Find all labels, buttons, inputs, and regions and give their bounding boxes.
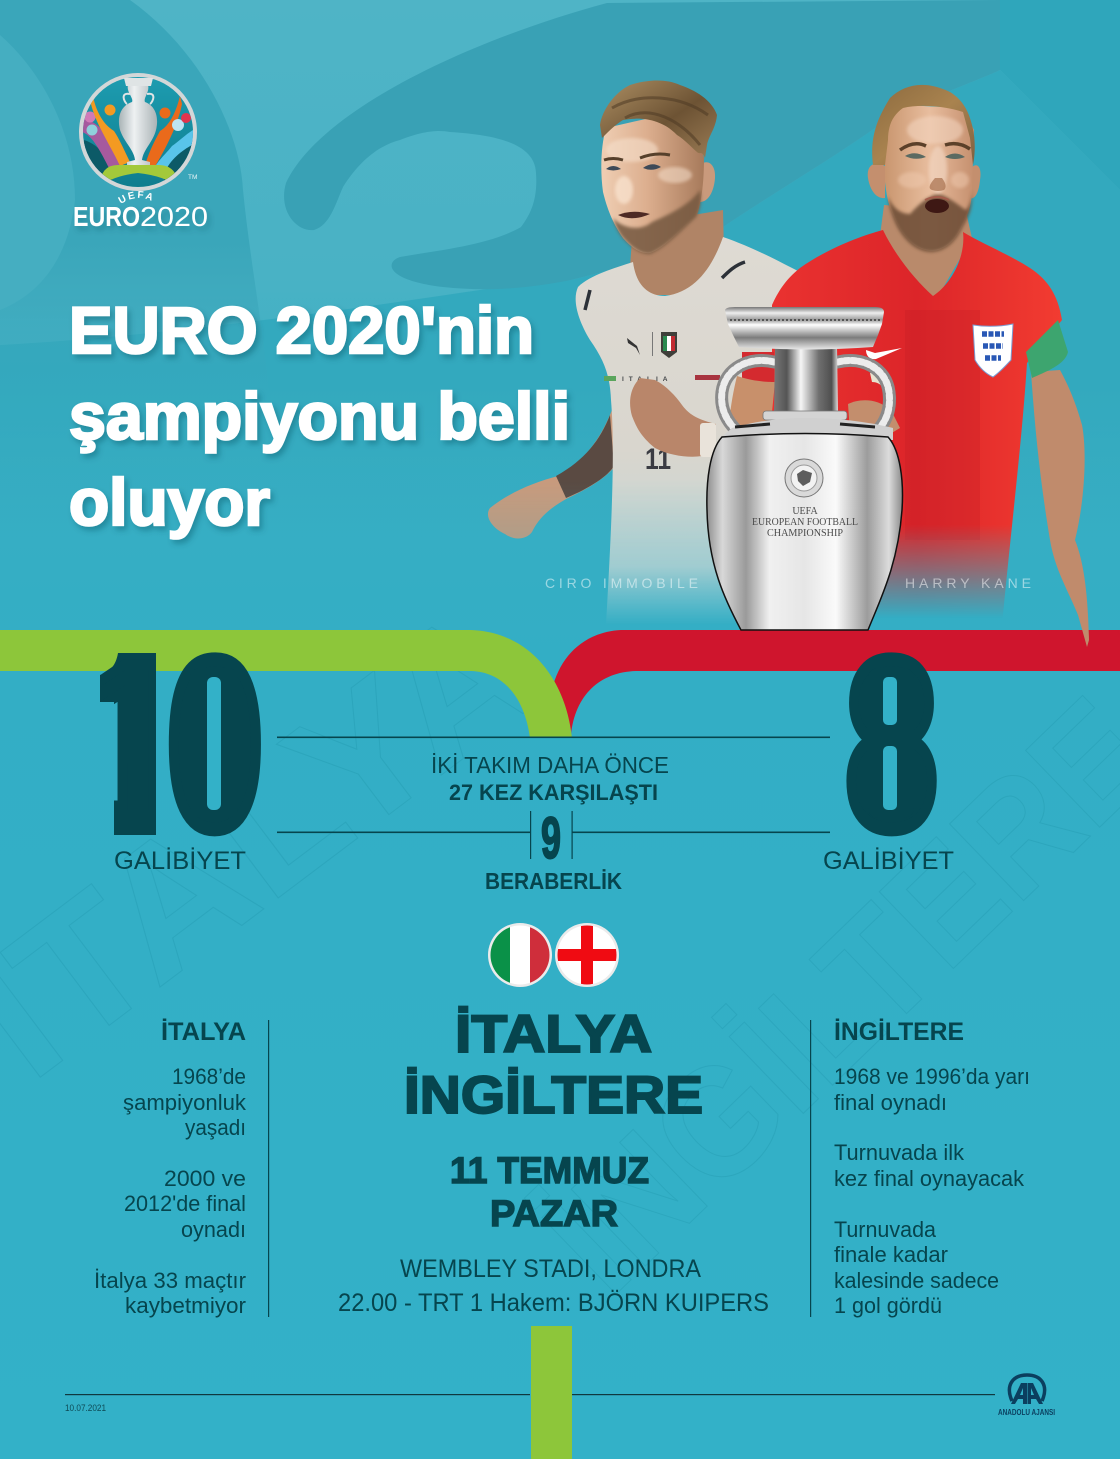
stat: England 8 wins: GALİBİYET [823,846,954,875]
title [69,293,570,539]
panel: Italy facts [94,1018,269,1318]
stat: head-to-head: BERABERLİK [485,868,622,894]
player: Ciro Immobile [488,80,800,625]
Kane ears [868,163,981,198]
title: EURO 2020'nin [69,293,534,367]
Kane swoosh [866,348,902,359]
panel: Italy facts: İTALYA [161,1018,246,1046]
ribbon: red (England) [552,630,1120,735]
Immobile shirt [576,237,800,625]
trophy collar [763,411,847,420]
Kane shirt [772,230,1062,625]
trophy engraving: UEFA [792,506,818,517]
logo: Anadolu Ajansi: ANADOLU AJANSI [998,1408,1055,1417]
stat: England 8 wins: 8 [846,610,937,878]
Kane neck [880,205,972,305]
Immobile badge [604,332,720,383]
trophy rim [725,307,884,350]
Kane hand [848,400,900,434]
logo medallion [79,73,197,191]
logo wordmark: EURO [73,201,140,232]
Kane crest [973,324,1013,377]
Kane hair [872,85,975,165]
match title [404,1005,703,1125]
flag: England [555,923,619,987]
panel: England facts: final oynadı [834,1090,947,1115]
Immobile beard [613,190,701,254]
panel: England facts: Turnuvada ilk [834,1140,965,1165]
Immobile neck [628,210,725,295]
stat: head-to-head: İKİ TAKIM DAHA ÖNCE [431,752,669,778]
logo trademark: TM [188,174,197,181]
Immobile hand [630,378,716,457]
trophy shoulder [718,418,893,440]
match title: İNGİLTERE [404,1066,703,1125]
match venue [338,1255,769,1317]
Kane far arm behind trophy [728,352,775,432]
player captions: CIRO IMMOBILE [545,575,698,591]
Immobile tattoo [556,415,614,498]
logo wordmark: 2020 [140,201,208,232]
Kane beard [888,190,972,252]
trophy body [707,434,902,630]
panel: England facts: finale kadar [834,1242,948,1267]
logo UEFA arc: UEFA [118,191,152,203]
stat: England 8 wins [823,610,954,878]
panel: Italy facts: 2000 ve [164,1166,246,1191]
logo: UEFA EURO 2020 [73,73,211,232]
panel: England facts: Turnuvada [834,1217,937,1242]
logo: Anadolu Ajansi [998,1375,1055,1417]
player captions: HARRY KANE [905,575,1031,591]
panel: Italy facts: kaybetmiyor [125,1293,246,1318]
trophy engraving: CHAMPIONSHIP [767,528,843,539]
stat: Italy 10 wins: 1 [69,613,196,881]
Kane armband [1026,320,1068,378]
trophy [707,307,902,630]
stat: head-to-head: 27 KEZ KARŞILAŞTI [449,780,658,805]
logo cup [119,78,157,165]
panel: Italy facts: oynadı [181,1217,246,1242]
Kane face [885,105,974,251]
Immobile number: 11 [645,443,671,476]
stat: head-to-head: 9 [541,806,561,871]
trophy neck [774,346,838,412]
Immobile hair [600,80,717,158]
panel: Italy facts: 2012'de final [124,1191,246,1216]
trophy handles [722,360,890,430]
player: Harry Kane [728,85,1089,647]
ribbon: green (Italy) [0,630,572,738]
match date [450,1150,649,1234]
title: şampiyonu belli [69,379,570,453]
match venue: WEMBLEY STADI, LONDRA [400,1255,701,1283]
footer rule [65,1394,995,1395]
player captions [545,575,1031,591]
match venue: 22.00 - TRT 1 Hakem: BJÖRN KUIPERS [338,1289,769,1317]
panel: Italy facts: yaşadı [185,1115,246,1140]
Immobile badge: ITALIA [622,376,672,383]
title: oluyor [69,465,270,539]
panel: England facts: 1968 ve 1996’da yarı [834,1064,1030,1089]
trophy engraving: EUROPEAN FOOTBALL [752,517,858,528]
stat: Italy 10 wins: GALİBİYET [114,846,246,875]
match date: PAZAR [490,1193,618,1234]
Immobile face [601,118,704,253]
trophy emblem [785,459,823,497]
match date: 11 TEMMUZ [450,1150,649,1191]
panel: Italy facts: 1968’de [172,1064,246,1089]
panel: Italy facts: İtalya 33 maçtır [94,1268,246,1293]
panel: England facts: 1 gol gördü [834,1293,942,1318]
footer date: 10.07.2021 [65,1403,106,1413]
Kane arm [1031,370,1089,647]
panel: Italy facts: şampiyonluk [123,1090,247,1115]
match title: İTALYA [455,1005,652,1064]
logo wordmark [73,201,208,232]
Immobile arm with tattoo [488,410,616,538]
footer bar [531,1326,572,1459]
panel: England facts [810,1018,1030,1318]
stat: Italy 10 wins: 0 [167,610,263,878]
Immobile ear [700,162,715,202]
flag: Italy [488,923,552,987]
stat: Italy 10 wins [100,652,261,869]
stat: head-to-head [277,736,830,894]
panel: England facts: kez final oynayacak [834,1166,1025,1191]
trophy engraving [752,506,858,539]
panel: England facts: kalesinde sadece [834,1268,999,1293]
Kane wrist wrap [870,372,896,400]
panel: England facts: İNGİLTERE [834,1018,964,1046]
